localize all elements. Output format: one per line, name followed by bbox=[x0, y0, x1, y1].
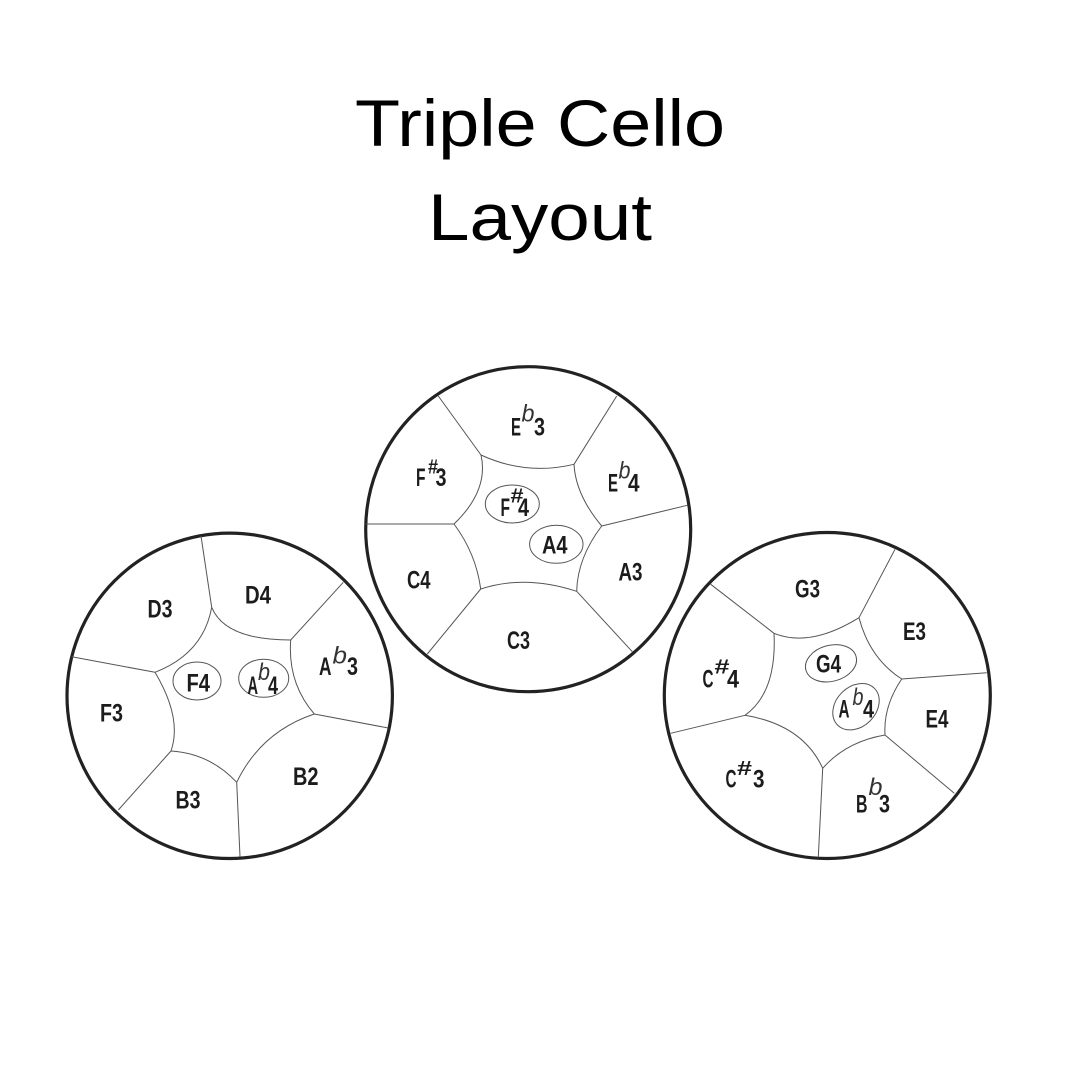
note: F sharp 3: # bbox=[428, 456, 438, 478]
note: B flat 3: B bbox=[856, 791, 868, 819]
note: D4: D4 bbox=[245, 581, 271, 609]
note: A4 bbox=[530, 525, 583, 563]
note: A flat 3: 3 bbox=[347, 653, 358, 681]
note: C sharp 4: 4 bbox=[727, 666, 739, 694]
note: F sharp 3: 3 bbox=[436, 464, 446, 492]
note: E flat 3: b bbox=[522, 401, 534, 428]
title: Triple Cello bbox=[355, 86, 725, 160]
note: B3: B3 bbox=[176, 786, 200, 814]
panel: centre pan bbox=[366, 367, 691, 692]
note: C sharp 4: C bbox=[702, 666, 714, 694]
note: A flat 4: b bbox=[258, 659, 270, 686]
note: E3: E3 bbox=[903, 618, 926, 646]
right pan note dividers bbox=[671, 549, 987, 857]
note: E flat 4: 4 bbox=[628, 470, 640, 498]
note: G4 bbox=[801, 639, 861, 687]
note: A flat 3 bbox=[319, 642, 358, 681]
note: A flat 4: 4 bbox=[268, 672, 278, 700]
panel: left pan bbox=[67, 533, 392, 858]
title: Layout bbox=[428, 180, 652, 254]
note: C sharp 3: # bbox=[737, 758, 752, 780]
note: G4: G4 bbox=[816, 651, 841, 679]
note: B flat 3 bbox=[856, 774, 890, 819]
panel: right pan bbox=[664, 532, 990, 858]
note: G3: G3 bbox=[795, 576, 820, 604]
left pan rim bbox=[67, 533, 392, 858]
note: C4: C4 bbox=[407, 566, 431, 594]
note: E flat 3: E bbox=[511, 413, 521, 441]
note: A flat 3: b bbox=[332, 642, 347, 669]
note: A flat 3: A bbox=[319, 653, 332, 681]
note: A flat 4: A bbox=[248, 672, 258, 700]
note: E flat 4: b bbox=[618, 457, 630, 484]
note: C3: C3 bbox=[507, 627, 530, 655]
left pan note dividers bbox=[72, 536, 388, 857]
note: C sharp 3: 3 bbox=[753, 766, 764, 794]
note: A flat 4: b bbox=[852, 684, 864, 711]
note: F sharp 4: F bbox=[500, 494, 510, 522]
note: B flat 3: b bbox=[868, 774, 882, 801]
note: E4: E4 bbox=[926, 706, 949, 734]
note: F4: F4 bbox=[186, 670, 210, 698]
note: A flat 4 bbox=[823, 674, 889, 739]
note: F sharp 4: # bbox=[510, 486, 524, 508]
note: A3: A3 bbox=[618, 559, 642, 587]
centre pan rim bbox=[366, 367, 691, 692]
note: E flat 3 bbox=[511, 401, 545, 441]
note: F3: F3 bbox=[100, 700, 123, 728]
note: A flat 4: 4 bbox=[863, 695, 874, 723]
note: A4: A4 bbox=[542, 531, 568, 559]
note: A flat 4 bbox=[239, 659, 289, 700]
note: F sharp 4 bbox=[485, 485, 539, 523]
title bbox=[355, 86, 725, 254]
note: D3: D3 bbox=[148, 596, 172, 624]
note: E flat 4: E bbox=[608, 470, 618, 498]
note: F sharp 3: F bbox=[416, 464, 426, 492]
right pan rim bbox=[664, 532, 990, 858]
note: E flat 4 bbox=[608, 457, 640, 498]
note: C sharp 4: # bbox=[714, 656, 730, 678]
note: C sharp 3: C bbox=[726, 766, 736, 794]
note: E flat 3: 3 bbox=[534, 413, 545, 441]
note: C sharp 3 bbox=[726, 758, 764, 794]
centre pan note dividers bbox=[366, 396, 687, 654]
note: B2: B2 bbox=[293, 763, 318, 791]
note: B flat 3: 3 bbox=[879, 791, 890, 819]
note: C sharp 4 bbox=[702, 656, 739, 694]
note: F sharp 4: 4 bbox=[518, 494, 529, 522]
note: A flat 4: A bbox=[838, 695, 850, 723]
note: F4 bbox=[173, 662, 221, 700]
note: F sharp 3 bbox=[416, 456, 446, 492]
